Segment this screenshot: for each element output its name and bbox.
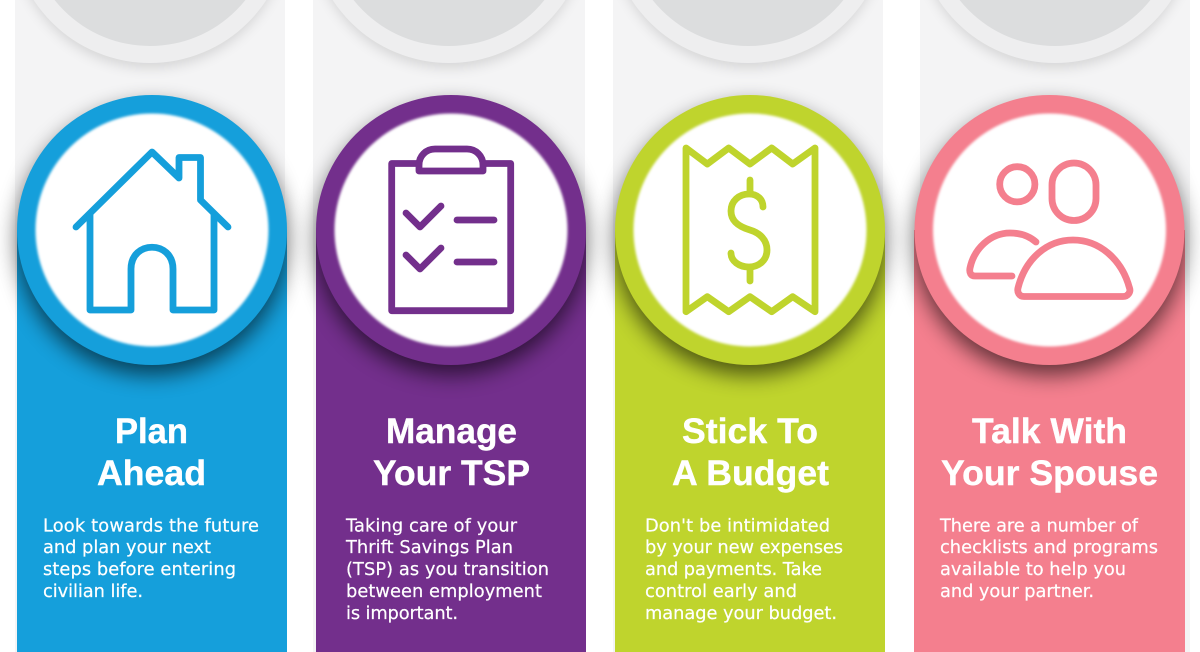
panel: plan ahead	[11, 0, 289, 652]
text: manage your tsp body: is important.	[346, 603, 458, 624]
title: talk with your spouse: Your Spouse	[941, 453, 1158, 493]
colored lower panel	[316, 230, 586, 652]
text: talk with your spouse body: checklists and programs	[940, 537, 1158, 558]
title: stick to a budget: A Budget	[672, 453, 829, 493]
gray placeholder circle	[310, 0, 588, 67]
text: stick to a budget body: and payments. Take	[645, 559, 822, 580]
title: talk with your spouse: Talk With	[972, 411, 1127, 451]
text: stick to a budget body: Don't be intimidated	[645, 516, 830, 536]
text: stick to a budget body: by your new expenses	[645, 537, 843, 558]
text: manage your tsp body: (TSP) as you transition	[346, 559, 549, 580]
title: stick to a budget: Stick To	[682, 411, 818, 451]
icon badge: receipt	[615, 95, 885, 375]
text: stick to a budget body: control early and	[645, 581, 797, 602]
text: plan ahead body: civilian life.	[43, 581, 143, 602]
text: talk with your spouse body: available to help you	[940, 559, 1126, 580]
colored lower panel	[615, 230, 885, 652]
panel: talk with your spouse	[914, 0, 1194, 652]
text: plan ahead body	[43, 516, 259, 602]
gray upper panel	[613, 0, 883, 652]
icon badge: two people	[914, 95, 1184, 375]
title: plan ahead	[97, 411, 206, 493]
title: manage your tsp: Your TSP	[373, 453, 530, 493]
text: talk with your spouse body: and your partner.	[940, 581, 1094, 602]
gray placeholder circle	[916, 0, 1194, 67]
gray placeholder circle	[11, 0, 289, 67]
text: plan ahead body: and plan your next	[43, 537, 211, 558]
text: talk with your spouse body	[939, 516, 1158, 602]
icon badge: house	[17, 95, 287, 375]
title: manage your tsp	[373, 411, 530, 493]
text: manage your tsp body: between employment	[346, 581, 542, 602]
title: manage your tsp: Manage	[386, 411, 517, 451]
text: plan ahead body: Look towards the future	[43, 516, 259, 536]
panel: manage your tsp	[310, 0, 588, 652]
panel: stick to a budget	[609, 0, 887, 652]
icon badge: clipboard	[316, 95, 586, 375]
gray upper panel	[920, 0, 1190, 652]
gray upper panel	[15, 0, 285, 652]
text: stick to a budget body: manage your budget.	[645, 603, 837, 624]
text: manage your tsp body: Thrift Savings Plan	[345, 537, 513, 558]
colored lower panel	[17, 230, 287, 652]
text: plan ahead body: steps before entering	[43, 559, 236, 580]
text: manage your tsp body: Taking care of your	[345, 516, 518, 536]
title: plan ahead: Ahead	[97, 453, 206, 493]
colored lower panel	[914, 230, 1185, 652]
gray upper panel	[313, 0, 585, 652]
title: plan ahead: Plan	[115, 411, 188, 451]
title: talk with your spouse	[941, 411, 1158, 493]
text: manage your tsp body	[345, 516, 549, 624]
gray placeholder circle	[609, 0, 887, 67]
title: stick to a budget	[672, 411, 829, 493]
text: talk with your spouse body: There are a number of	[939, 516, 1139, 536]
text: stick to a budget body	[645, 516, 843, 624]
